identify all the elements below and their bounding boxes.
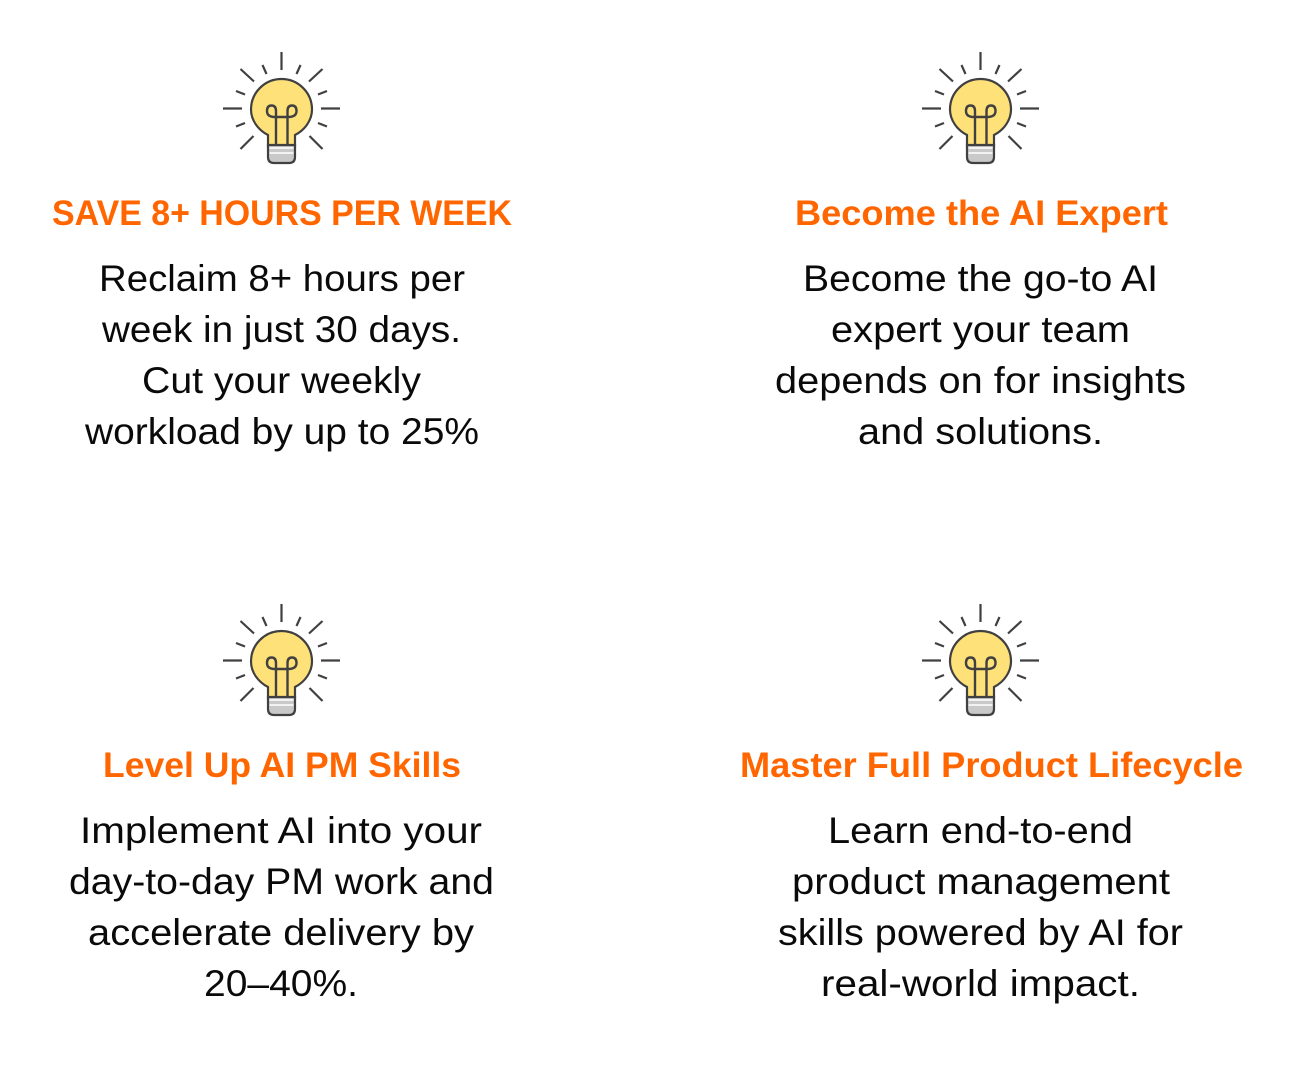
icon: light bulb [223, 52, 340, 163]
text block: Implement AI into your [80, 810, 482, 851]
title: Level Up AI PM Skills [103, 746, 461, 785]
title: SAVE 8+ HOURS PER WEEK [52, 194, 512, 233]
text block: Cut your weekly [142, 360, 422, 401]
text block: skills powered by AI for [778, 912, 1183, 953]
text block: day-to-day PM work and [69, 861, 494, 902]
text block: Become the go-to AI [803, 258, 1158, 299]
panel: become the AI expert [775, 52, 1186, 452]
text block [84, 258, 479, 452]
panel: master full product lifecycle [740, 604, 1243, 1004]
text block: depends on for insights [775, 360, 1186, 401]
text block: Reclaim 8+ hours per [99, 258, 465, 299]
text block: Learn end-to-end [828, 810, 1133, 851]
text block: week in just 30 days. [101, 309, 461, 350]
text block: workload by up to 25% [84, 411, 479, 452]
text block: accelerate delivery by [88, 912, 475, 953]
title: Become the AI Expert [795, 194, 1168, 233]
title: Master Full Product Lifecycle [740, 746, 1243, 785]
text block: and solutions. [858, 411, 1103, 452]
text block [775, 258, 1186, 452]
text block [69, 810, 494, 1004]
text block [778, 810, 1183, 1004]
icon: light bulb [223, 604, 340, 715]
icon: light bulb [922, 52, 1039, 163]
text block: 20–40%. [204, 963, 358, 1004]
panel: save 8+ hours [52, 52, 512, 452]
text block: expert your team [831, 309, 1130, 350]
panel: level up AI PM skills [69, 604, 494, 1004]
text block: real-world impact. [821, 963, 1140, 1004]
text block: product management [792, 861, 1171, 902]
icon: light bulb [922, 604, 1039, 715]
